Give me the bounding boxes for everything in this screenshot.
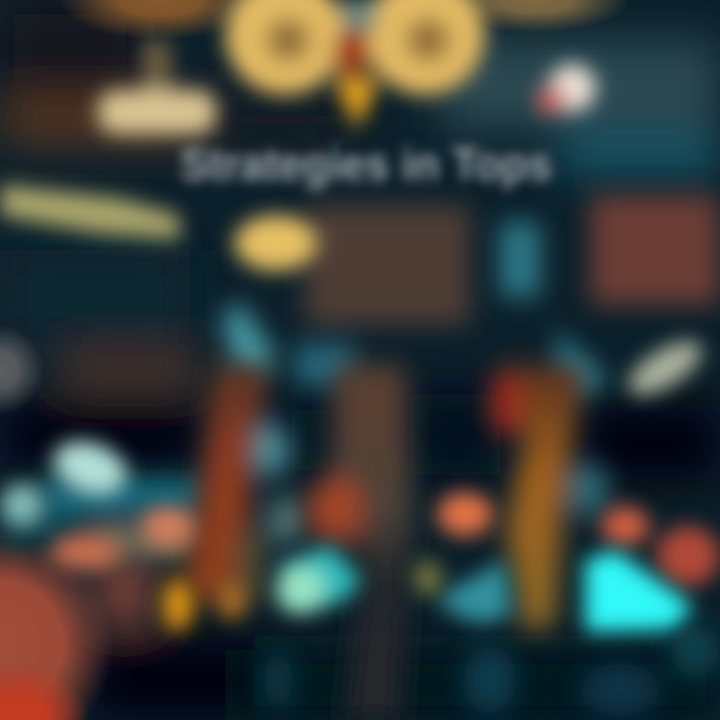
- lower left red field: [0, 530, 190, 720]
- top edge glow: left: [60, 0, 260, 80]
- left pendant lamp: [98, 40, 216, 134]
- cyan table glow: [276, 545, 692, 632]
- left edge gray glow: [0, 325, 90, 415]
- left light bar: [0, 184, 180, 240]
- centre lamp: [234, 215, 318, 271]
- title: Strategies in Tops: [180, 138, 552, 190]
- main chandelier: [250, 0, 460, 130]
- teal column: [222, 222, 612, 395]
- lower left red corner: [0, 650, 90, 720]
- top edge glow: right: [440, 0, 630, 65]
- figure: centre player: [307, 365, 412, 720]
- figure: right player: [490, 365, 609, 632]
- table highlights: [0, 330, 720, 586]
- right glowing globe: [536, 64, 596, 115]
- wall panels: [0, 195, 720, 557]
- lower floor reflections: [264, 624, 719, 716]
- figure: left player: [186, 365, 303, 605]
- amber glasses: [163, 560, 442, 631]
